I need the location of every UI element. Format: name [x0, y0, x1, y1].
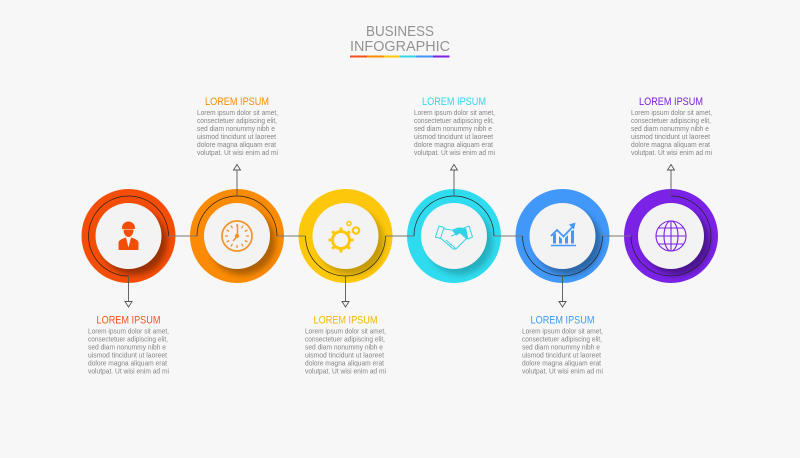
icon: clock: [222, 221, 252, 251]
text: step 1: volutpat. Ut wisi enim ad mi: [88, 366, 169, 375]
text: step 4: sed diam nonummy nibh e: [414, 124, 492, 133]
title underline: [350, 56, 450, 58]
text: step 4: [414, 96, 495, 157]
text: step 4: Lorem ipsum dolor sit amet,: [414, 108, 495, 117]
text: step 1: sed diam nonummy nibh e: [88, 342, 166, 351]
text: step 3: Lorem ipsum dolor sit amet,: [305, 326, 386, 335]
text: step 3: uismod tincidunt ut laoreet: [305, 350, 384, 359]
text: step 2: Lorem ipsum dolor sit amet,: [197, 108, 278, 117]
text: step 4: volutpat. Ut wisi enim ad mi: [414, 148, 495, 157]
text: step 3: dolore magna aliquam erat: [305, 358, 384, 367]
arrow step 5: [559, 276, 566, 307]
text: step 5: sed diam nonummy nibh e: [522, 342, 600, 351]
text: step 5: [522, 314, 603, 375]
text: step 1: [88, 314, 169, 375]
icon: businessman: [118, 222, 138, 250]
text: step 4: consectetuer adipiscing elit,: [414, 116, 494, 125]
title: BUSINESS: [366, 24, 434, 40]
arrow step 3: [342, 276, 349, 307]
step 6 circle: [624, 189, 718, 283]
step 5 circle: [516, 189, 610, 283]
text: step 4: dolore magna aliquam erat: [414, 140, 493, 149]
text: step 4: LOREM IPSUM: [422, 96, 486, 108]
arrow step 1: [125, 276, 132, 307]
text: step 6: uismod tincidunt ut laoreet: [631, 132, 710, 141]
text: step 3: LOREM IPSUM: [314, 314, 378, 326]
text: step 5: LOREM IPSUM: [530, 314, 594, 326]
text: step 3: volutpat. Ut wisi enim ad mi: [305, 366, 386, 375]
text: step 1: dolore magna aliquam erat: [88, 358, 167, 367]
title: INFOGRAPHIC: [350, 39, 450, 55]
text: step 2: dolore magna aliquam erat: [197, 140, 276, 149]
text: step 2: volutpat. Ut wisi enim ad mi: [197, 148, 278, 157]
text: step 1: uismod tincidunt ut laoreet: [88, 350, 167, 359]
icon: growth chart: [551, 222, 576, 246]
connector lines: [168, 235, 631, 237]
icon: gears: [328, 222, 359, 252]
text: step 1: LOREM IPSUM: [96, 314, 160, 326]
text: step 3: consectetuer adipiscing elit,: [305, 334, 385, 343]
text: step 1: consectetuer adipiscing elit,: [88, 334, 168, 343]
text: step 5: consectetuer adipiscing elit,: [522, 334, 602, 343]
text: step 1: Lorem ipsum dolor sit amet,: [88, 326, 169, 335]
text: step 3: [305, 314, 386, 375]
arrow step 2: [234, 164, 240, 196]
text: step 5: uismod tincidunt ut laoreet: [522, 350, 601, 359]
icon: globe: [656, 221, 686, 251]
timeline arcs: [88, 196, 711, 276]
text: step 6: volutpat. Ut wisi enim ad mi: [631, 148, 712, 157]
text: step 2: consectetuer adipiscing elit,: [197, 116, 277, 125]
text: step 4: uismod tincidunt ut laoreet: [414, 132, 493, 141]
text: step 5: Lorem ipsum dolor sit amet,: [522, 326, 603, 335]
text: step 6: consectetuer adipiscing elit,: [631, 116, 711, 125]
text: step 2: [197, 96, 278, 157]
text: step 6: LOREM IPSUM: [639, 96, 703, 108]
step 3 circle: [298, 189, 392, 283]
text: step 3: sed diam nonummy nibh e: [305, 342, 383, 351]
text: step 2: uismod tincidunt ut laoreet: [197, 132, 276, 141]
step 4 circle: [407, 189, 501, 283]
arrow step 4: [450, 164, 458, 196]
text: step 6: sed diam nonummy nibh e: [631, 124, 709, 133]
step 2 circle: [190, 189, 284, 283]
text: step 6: [631, 96, 712, 157]
text: step 2: sed diam nonummy nibh e: [197, 124, 275, 133]
arrow step 6: [668, 164, 674, 196]
step 1 circle: [82, 189, 176, 283]
text: step 5: dolore magna aliquam erat: [522, 358, 601, 367]
icon: handshake: [436, 226, 472, 249]
text: step 6: Lorem ipsum dolor sit amet,: [631, 108, 712, 117]
text: step 2: LOREM IPSUM: [205, 96, 269, 108]
title: [350, 24, 450, 58]
text: step 6: dolore magna aliquam erat: [631, 140, 710, 149]
text: step 5: volutpat. Ut wisi enim ad mi: [522, 366, 603, 375]
